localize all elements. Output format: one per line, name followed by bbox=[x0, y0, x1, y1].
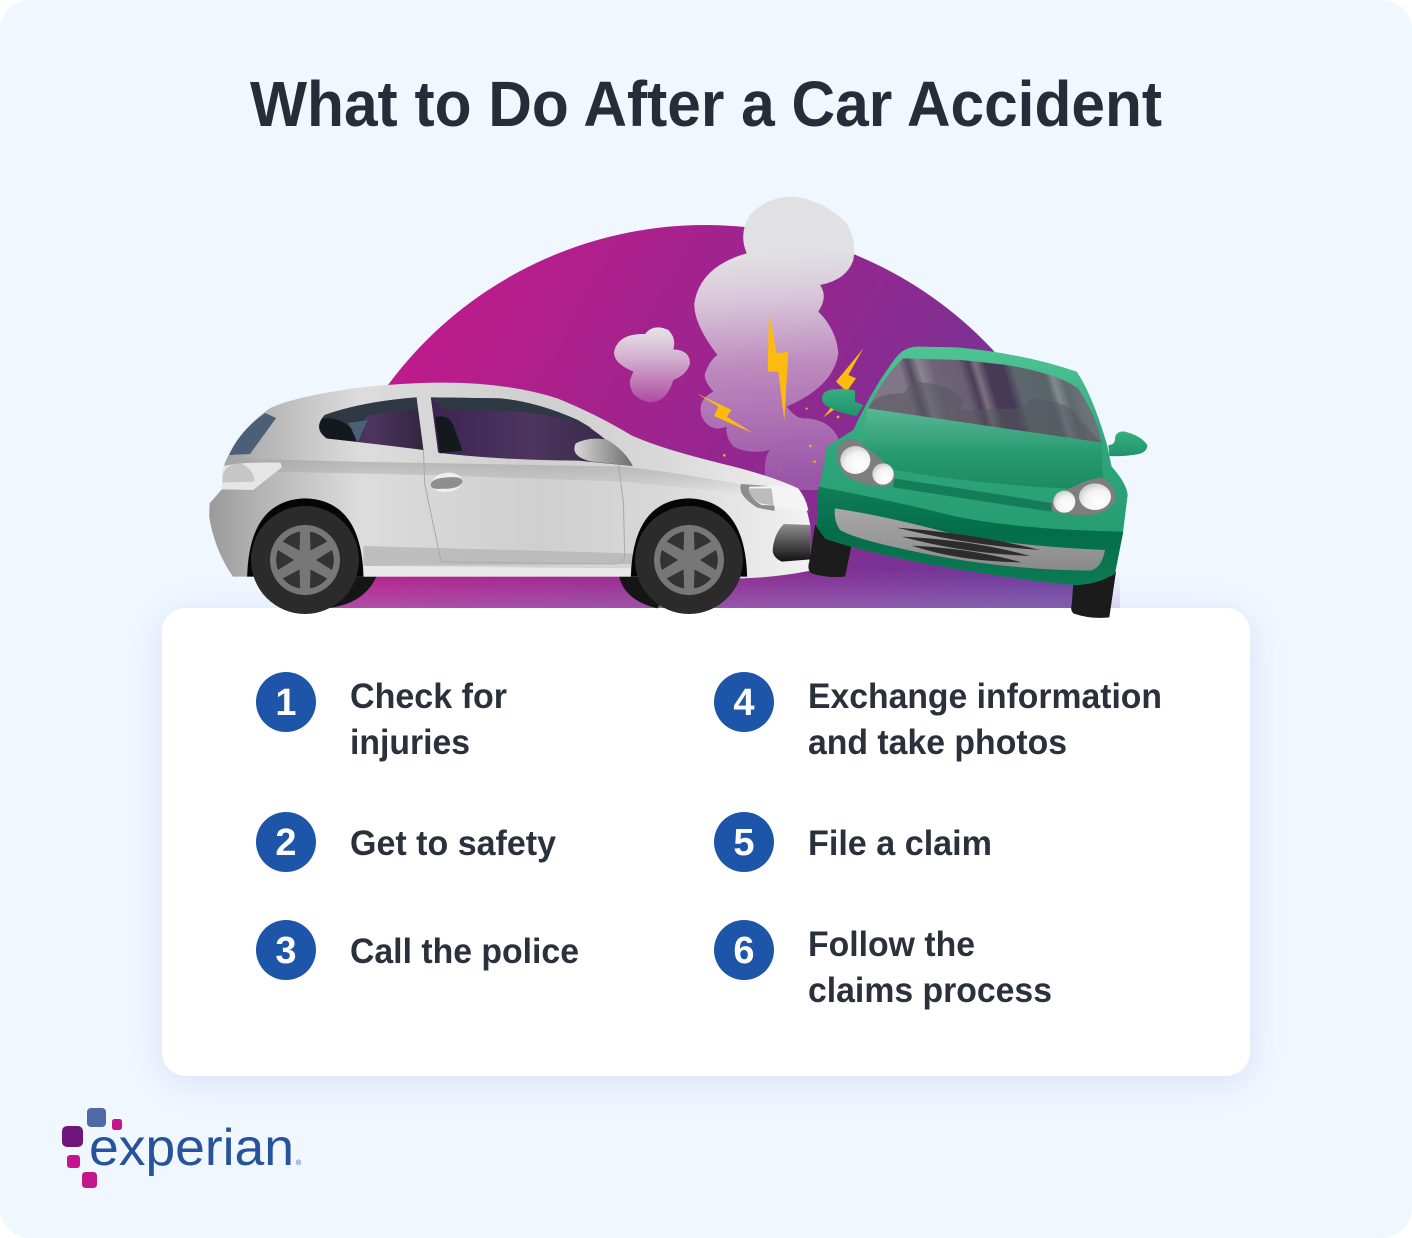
silver car bbox=[209, 383, 810, 614]
logo squares bbox=[62, 1108, 122, 1188]
lightning bolts and sparks bbox=[697, 312, 863, 469]
step 4: Exchange information bbox=[808, 677, 1162, 716]
illustration: car accident bbox=[209, 197, 1147, 618]
left headlights bbox=[837, 439, 895, 487]
car body bbox=[817, 347, 1128, 585]
step 1: injuries bbox=[350, 723, 470, 762]
step 6 bbox=[714, 920, 1052, 1010]
step 6: Follow the bbox=[808, 925, 975, 964]
steps list bbox=[256, 672, 1162, 1010]
lower bumper bbox=[817, 487, 1123, 585]
step 1: 1 bbox=[275, 682, 297, 724]
tail light bbox=[222, 462, 282, 490]
right headlights bbox=[1052, 477, 1115, 515]
wing mirror bbox=[574, 439, 633, 466]
green car tyres bbox=[808, 525, 852, 577]
purple semicircle backdrop bbox=[330, 225, 1120, 608]
step 2: Get to safety bbox=[350, 824, 557, 863]
green car bbox=[808, 347, 1147, 618]
registered mark: ® bbox=[296, 1159, 302, 1167]
front bumper vent bbox=[773, 524, 810, 562]
white content panel bbox=[162, 608, 1250, 1076]
step 3: 3 bbox=[275, 930, 297, 972]
step 4: and take photos bbox=[808, 723, 1067, 762]
step 1 bbox=[256, 672, 507, 762]
step 6: 6 bbox=[733, 930, 755, 972]
bonnet shadow line bbox=[893, 478, 1053, 512]
far-side tyres bbox=[321, 573, 680, 608]
step 6: claims process bbox=[808, 971, 1052, 1010]
step 1: Check for bbox=[350, 677, 507, 716]
body creases bbox=[225, 458, 774, 495]
headlight bbox=[741, 484, 808, 511]
title: What to Do After a Car Accident bbox=[250, 68, 1162, 140]
front wheel bbox=[635, 506, 743, 614]
wordmark: experian bbox=[89, 1119, 294, 1177]
left mirror bbox=[822, 389, 863, 416]
step 5 bbox=[714, 812, 992, 872]
white panel shadow bbox=[162, 614, 1250, 1082]
step 2 bbox=[256, 812, 557, 872]
step 3 bbox=[256, 920, 579, 980]
logo: experian bbox=[62, 1108, 302, 1188]
wheel arches bbox=[247, 498, 747, 577]
step 5: File a claim bbox=[808, 824, 992, 863]
door handle bbox=[432, 473, 463, 492]
door outline bbox=[423, 450, 625, 564]
step 4 bbox=[714, 672, 1162, 762]
step 5: 5 bbox=[733, 822, 755, 864]
step 4: 4 bbox=[733, 682, 755, 724]
step 3: Call the police bbox=[350, 932, 579, 971]
side windows bbox=[319, 397, 423, 450]
windshield bbox=[868, 358, 1102, 443]
smoke clouds bbox=[614, 197, 863, 490]
grille slots bbox=[897, 528, 1040, 562]
grille bbox=[835, 508, 1105, 571]
step 2: 2 bbox=[275, 822, 297, 864]
car body bbox=[209, 383, 810, 578]
rear glass bbox=[229, 413, 276, 455]
hood bbox=[862, 408, 1103, 490]
rear wheel bbox=[251, 506, 359, 614]
right mirror bbox=[1108, 432, 1147, 456]
